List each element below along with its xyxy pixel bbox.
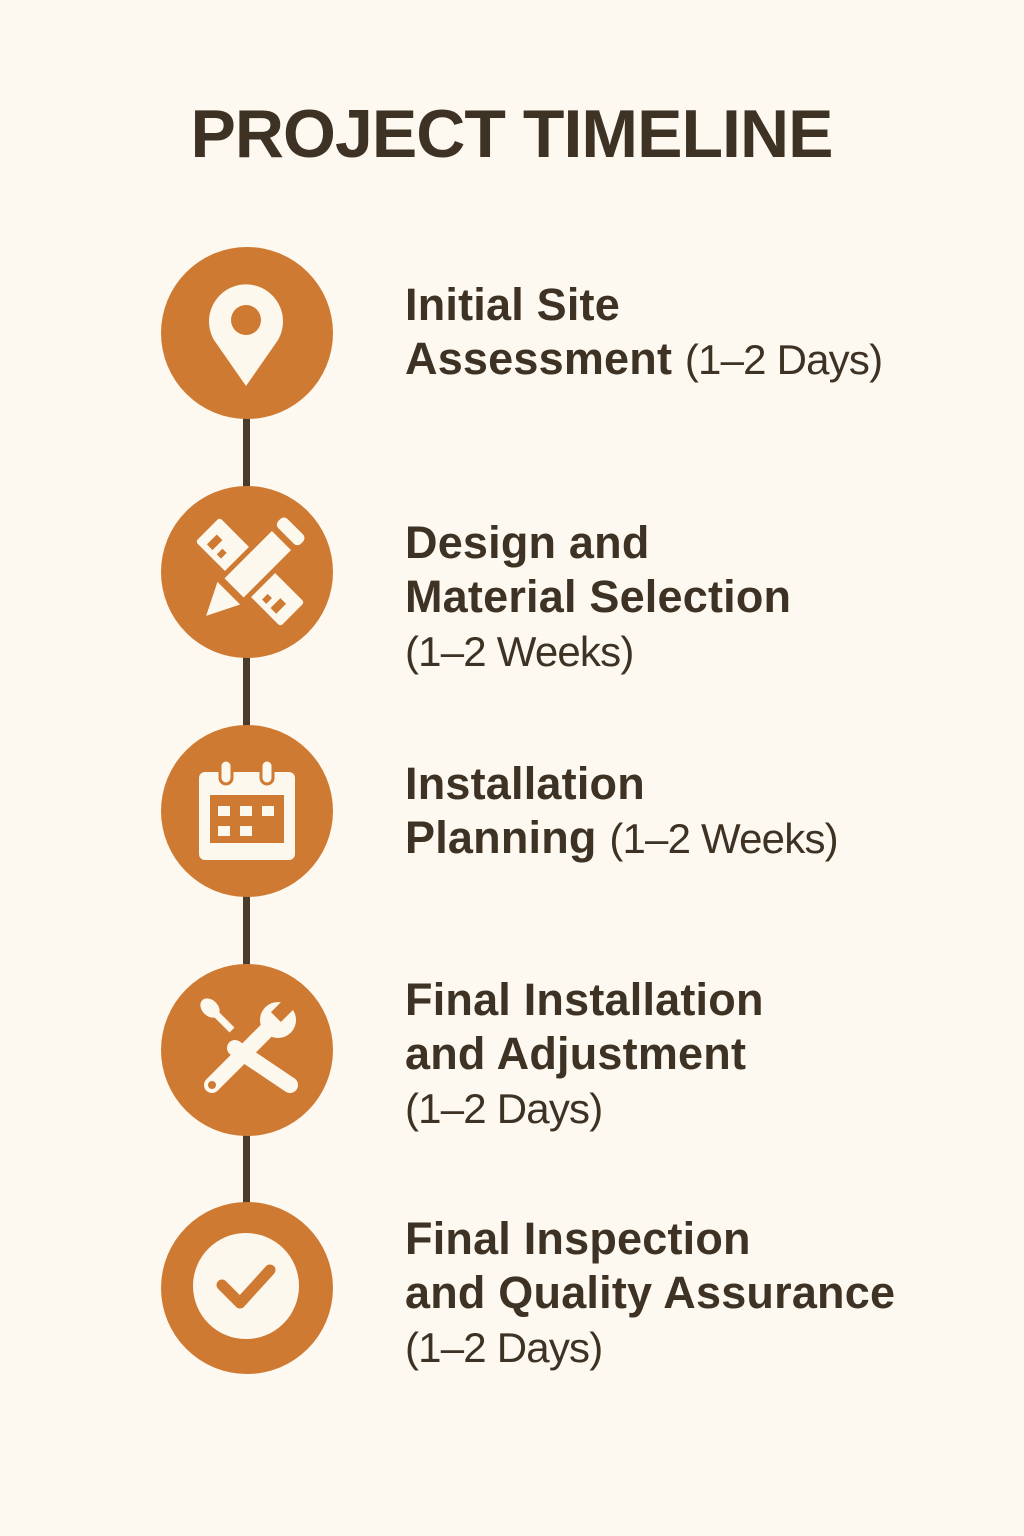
step 3 text	[405, 758, 838, 863]
step 1 text	[405, 279, 882, 384]
step 5 icon: check mark	[161, 1202, 333, 1374]
title: PROJECT TIMELINE	[190, 96, 834, 172]
step 5 text: (1–2 Days)	[405, 1324, 602, 1371]
step 5 text	[405, 1213, 895, 1371]
step 3 text: Planning (1–2 Weeks)	[405, 812, 838, 863]
step 4 text: Final Installation	[405, 974, 764, 1025]
step 1 text: Assessment (1–2 Days)	[405, 333, 882, 384]
step 4 icon: wrench and screwdriver	[161, 964, 333, 1136]
step 3 text: Installation	[405, 758, 645, 809]
step 5 text: and Quality Assurance	[405, 1267, 895, 1318]
timeline connector line	[243, 330, 250, 1290]
step 2 text	[405, 517, 791, 675]
step 2 text: (1–2 Weeks)	[405, 628, 634, 675]
step 2 text: Material Selection	[405, 571, 791, 622]
step 4 text: (1–2 Days)	[405, 1085, 602, 1132]
step 1 text: Initial Site	[405, 279, 620, 330]
step 2 icon: pencil and ruler	[161, 486, 333, 658]
step 1 icon: location pin	[161, 247, 333, 419]
step 2 text: Design and	[405, 517, 650, 568]
step 4 text	[405, 974, 764, 1132]
step 5 text: Final Inspection	[405, 1213, 751, 1264]
step 3 icon: calendar	[161, 725, 333, 897]
step 4 text: and Adjustment	[405, 1028, 746, 1079]
